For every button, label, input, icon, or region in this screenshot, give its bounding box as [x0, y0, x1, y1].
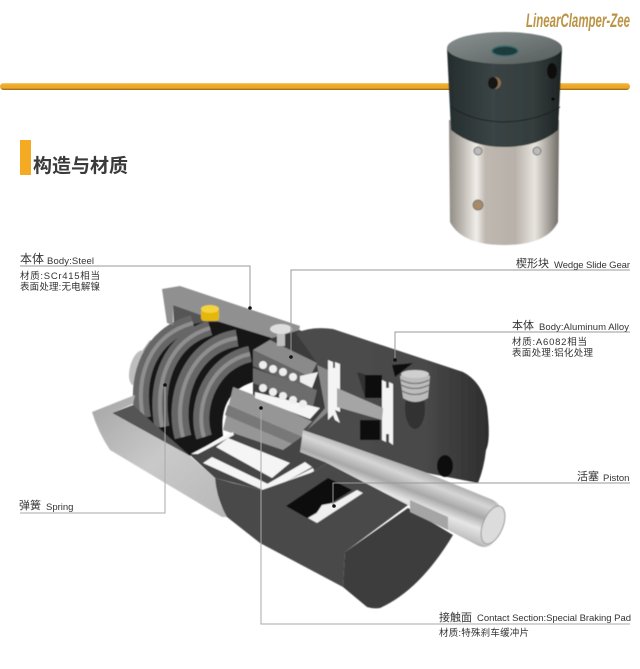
callout: contact section [259, 406, 631, 639]
pan head screw [270, 324, 292, 346]
centre bore [492, 46, 518, 56]
callout: spring: 弹簧 [19, 498, 41, 512]
callout: wedge slide gear [289, 257, 630, 359]
white plates [328, 360, 340, 423]
springs [141, 323, 250, 437]
callout: spring [19, 383, 167, 513]
callout: piston: Piston [603, 473, 629, 484]
callout: body steel: Body:Steel [47, 256, 94, 267]
inner shaft [223, 387, 320, 458]
callout: piston [332, 469, 630, 508]
bore hole [437, 455, 453, 477]
piston end face [476, 503, 510, 547]
steel lower body [449, 120, 559, 245]
screws [474, 147, 482, 155]
end stub [126, 340, 175, 405]
lower window pad [308, 490, 363, 523]
header orange bar [0, 83, 630, 90]
callout: body steel: 材质:SCr415相当 [20, 270, 100, 282]
body seam [451, 107, 560, 122]
port right [547, 63, 557, 79]
wedge block [253, 340, 320, 419]
callout: body aluminum: 材质:A6082相当 [512, 336, 587, 348]
translucent link [307, 365, 328, 430]
black pockets [357, 372, 382, 398]
heading: 构造与材质 [33, 154, 128, 177]
callout: body steel: 表面处理:无电解镍 [20, 281, 100, 293]
callout: body steel [20, 252, 252, 310]
lower steel shell [92, 395, 227, 517]
backing behind wedge [253, 330, 330, 440]
top face [447, 32, 562, 64]
callout: body aluminum: Body:Aluminum Alloy [539, 322, 629, 333]
callout: body aluminum [393, 318, 630, 362]
lower window [286, 478, 352, 518]
callout: contact section: 接触面 [439, 610, 472, 624]
dark aluminum upper body [296, 328, 489, 483]
lower slot base [190, 433, 327, 490]
piston sleeve [410, 500, 448, 530]
callout: spring: Spring [46, 502, 73, 513]
black backing behind springs [135, 322, 272, 456]
port left [488, 77, 501, 89]
callout: body aluminum: 本体 [512, 318, 534, 332]
yellow plug [201, 305, 219, 321]
shell interior base [112, 405, 190, 456]
mount recess [392, 363, 413, 377]
housing interior back [173, 305, 272, 352]
callout: piston: 活塞 [577, 469, 599, 483]
callout: body aluminum: 表面处理:铝化处理 [512, 347, 593, 359]
callout: wedge slide gear: Wedge Slide Gear [554, 260, 630, 271]
cutaway assembly [92, 286, 510, 608]
bolt [400, 370, 430, 402]
callout: wedge slide gear: 楔形块 [516, 257, 549, 270]
piston rod [300, 430, 503, 547]
callout: contact section: 材质:特殊刹车缓冲片 [439, 627, 529, 639]
lower dark body right end face [343, 508, 453, 608]
small port [552, 98, 554, 100]
brass plug [473, 200, 483, 210]
callout: body steel: 本体 [20, 252, 44, 266]
steel housing top wall [162, 286, 300, 345]
cross shaft [337, 388, 383, 420]
callout: contact section: Contact Section:Special Braking Pad [477, 613, 631, 624]
product photo: cylinder [447, 32, 562, 245]
lower white slot lines [191, 432, 314, 497]
dark upper body [447, 48, 562, 147]
lower dark body top [215, 463, 408, 587]
bolt shadow [405, 387, 425, 429]
section marker [20, 140, 31, 175]
